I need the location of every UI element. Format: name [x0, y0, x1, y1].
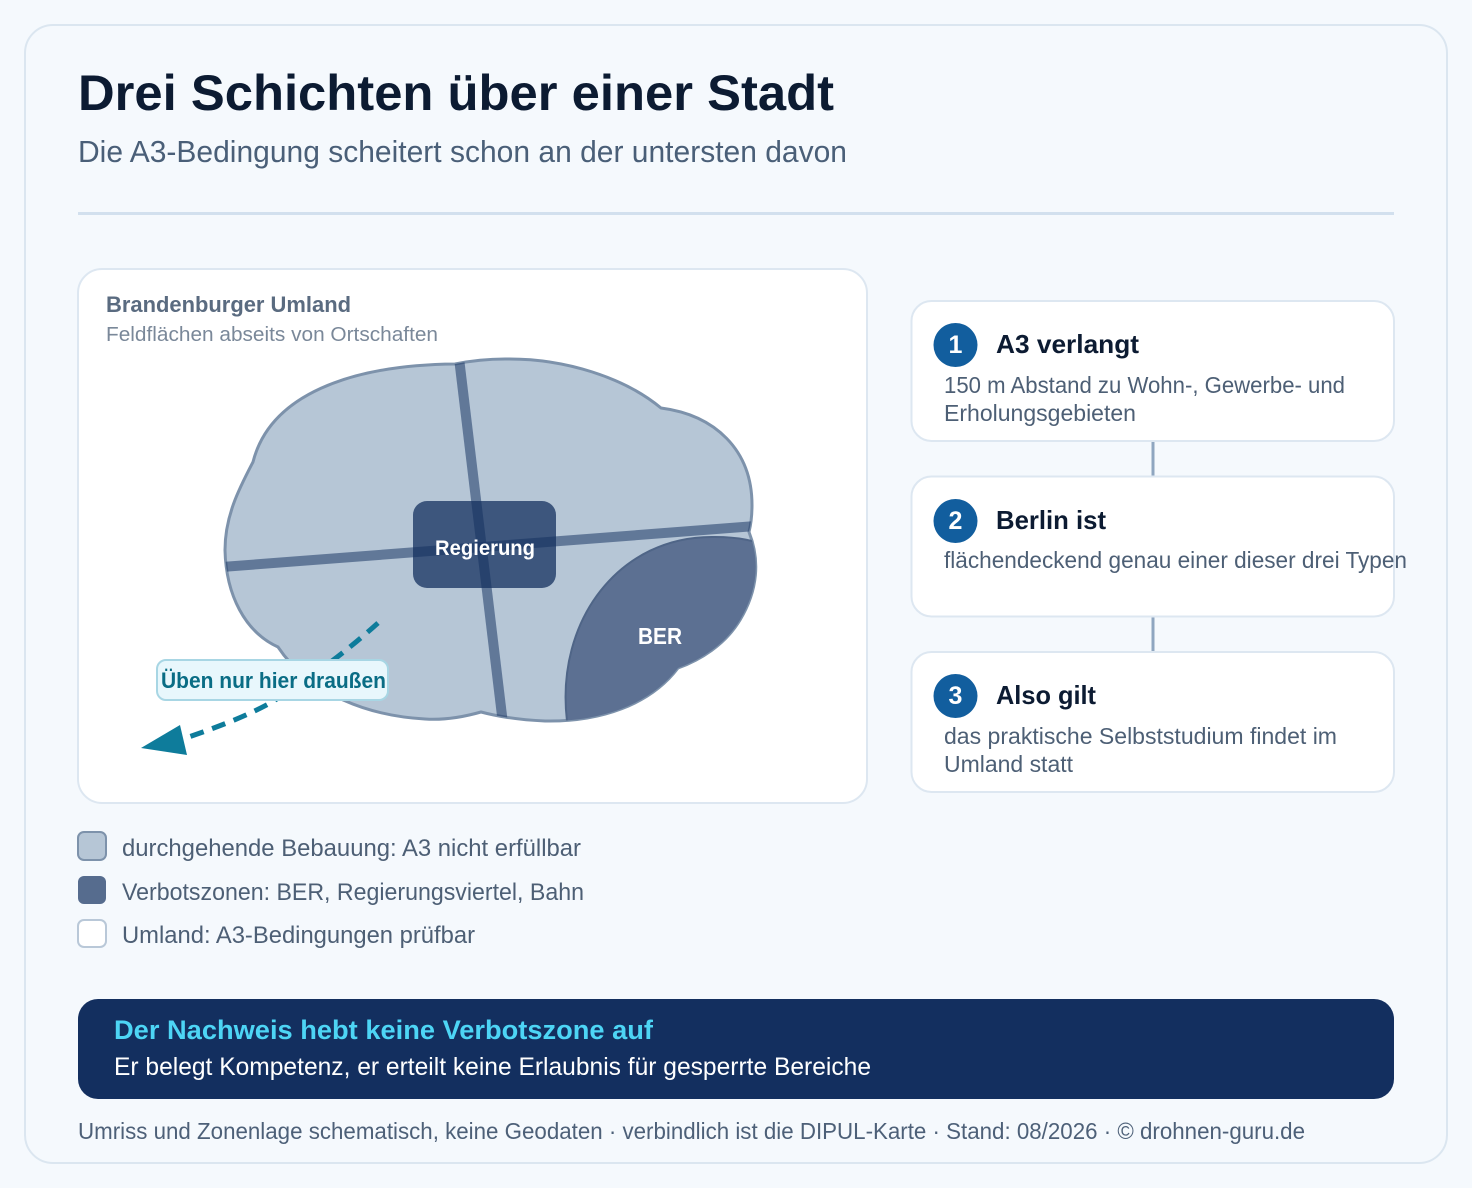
card 2: flächendeckend genau einer dieser drei Typen [944, 547, 1407, 573]
zone: BER [564, 536, 756, 720]
city outline: durchgehende Bebauung [225, 359, 756, 721]
rail lines [222, 358, 756, 724]
card 3: 3 [949, 682, 962, 710]
card 3: Also gilt [996, 680, 1096, 710]
subtitle: Die A3-Bedingung scheitert schon an der untersten davon [78, 134, 847, 169]
callout banner [78, 999, 1394, 1099]
legend item: Verbotszonen: Verbotszonen: BER, Regierungsviertel, Bahn [122, 879, 584, 906]
panel: map [78, 269, 867, 803]
footer: Umriss und Zonenlage schematisch, keine Geodaten · verbindlich ist die DIPUL-Karte · Stand: 08/2026 · © drohnen-guru.de [78, 1118, 1305, 1144]
card 1: Erholungsgebieten [944, 400, 1136, 426]
BER label: BER [638, 623, 682, 649]
card 2: 2 [949, 507, 962, 535]
callout banner: Er belegt Kompetenz, er erteilt keine Erlaubnis für gesperrte Bereiche [114, 1053, 871, 1081]
map subheading: Feldflächen abseits von Ortschaften [106, 324, 438, 346]
legend [78, 832, 584, 949]
card 1: 1 [949, 331, 963, 359]
callout: Üben nur hier draußen [161, 668, 386, 693]
card 3: das praktische Selbststudium findet im [944, 723, 1337, 749]
callout banner: Der Nachweis hebt keine Verbotszone auf [114, 1015, 654, 1045]
zone: Regierung: Regierung [435, 537, 535, 560]
card 1: 150 m Abstand zu Wohn-, Gewerbe- und [944, 372, 1345, 398]
legend item: Bebauung: durchgehende Bebauung: A3 nicht erfüllbar [122, 835, 581, 862]
card 1 [912, 301, 1394, 441]
card 3: Umland statt [944, 751, 1074, 777]
map heading: Brandenburger Umland [106, 292, 351, 317]
card 1: A3 verlangt [996, 329, 1139, 359]
zone: Regierung [413, 501, 556, 588]
title: Drei Schichten über einer Stadt [78, 65, 834, 121]
arrow: outward [141, 623, 378, 755]
card 2 [912, 476, 1407, 616]
callout [157, 660, 388, 700]
card 3 [912, 652, 1394, 792]
card 2: Berlin ist [996, 505, 1106, 535]
legend item: Umland: Umland: A3-Bedingungen prüfbar [122, 922, 475, 949]
connector lines [1152, 441, 1154, 652]
